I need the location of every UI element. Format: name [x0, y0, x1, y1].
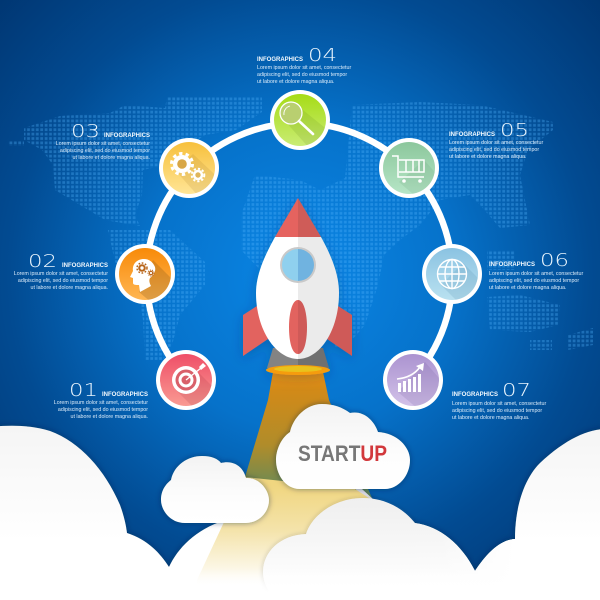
cloud bank silhouette — [0, 426, 600, 600]
text block 01: INFOGRAPHICS — [102, 392, 148, 398]
text block 04 — [257, 45, 351, 85]
text block 02: ut labore et dolore magna aliqua. — [31, 285, 108, 291]
rocket center stripe — [289, 300, 307, 354]
icon: head with gears — [130, 259, 155, 292]
text block 03: ut labore et dolore magna aliqua. — [73, 155, 150, 161]
text block 01: 01 — [69, 380, 98, 401]
text block 07: INFOGRAPHICS — [452, 392, 498, 398]
step 02 circle — [115, 244, 175, 304]
text block 05: 05 — [500, 120, 529, 141]
text block 06: 06 — [540, 250, 569, 271]
text block 07: ut labore et dolore magna aliqua. — [452, 415, 529, 421]
rocket nozzle — [267, 348, 298, 368]
text block 05 — [449, 120, 543, 160]
text block 05: INFOGRAPHICS — [449, 132, 495, 138]
rocket — [243, 198, 352, 375]
text block 02: adipiscing elit, sed do eiusmod tempor — [18, 278, 108, 284]
text block 04: INFOGRAPHICS — [257, 57, 303, 63]
icon: growth chart — [397, 363, 424, 392]
step 06 circle — [422, 244, 482, 304]
text block 04: ut labore et dolore magna aliqua. — [257, 79, 334, 85]
front cloud — [263, 498, 450, 600]
text block 03: INFOGRAPHICS — [104, 133, 150, 139]
text block 05: ut labore et dolore magna aliqua. — [449, 154, 526, 160]
dotted world map — [0, 90, 600, 360]
text block 02: INFOGRAPHICS — [62, 263, 108, 269]
step 04 circle — [270, 90, 330, 150]
text block 01: adipiscing elit, sed do eiusmod tempor — [58, 407, 148, 413]
step 07 circle — [383, 350, 443, 410]
text block 05: Lorem ipsum dolor sit amet, consectetur — [449, 140, 543, 146]
icon: target — [172, 363, 206, 394]
text block 06: INFOGRAPHICS — [489, 262, 535, 268]
rocket fins — [243, 306, 352, 356]
text block 02 — [14, 251, 108, 291]
text block 02: 02 — [28, 251, 57, 272]
lit beam on the cloud bank — [197, 477, 415, 590]
rocket exhaust beam — [245, 372, 372, 498]
text block 05: adipiscing elit, sed do eiusmod tempor — [449, 147, 539, 153]
rocket flame ring — [266, 365, 330, 375]
text block 06: ut labore et dolore magna aliqua. — [489, 285, 566, 291]
step 03 circle — [159, 138, 219, 198]
text block 07: Lorem ipsum dolor sit amet, consectetur — [452, 401, 546, 407]
text block 03 — [56, 121, 150, 161]
small cloud — [161, 456, 269, 523]
icon: globe — [438, 260, 466, 288]
text block 03: adipiscing elit, sed do eiusmod tempor — [60, 148, 150, 154]
step 05 circle — [379, 138, 439, 198]
text block 07 — [452, 380, 546, 421]
rocket window — [280, 247, 316, 283]
text block 06: Lorem ipsum dolor sit amet, consectetur — [489, 271, 583, 277]
text block 01 — [54, 380, 148, 420]
startup cloud — [276, 404, 410, 489]
startup label: STARTUP — [298, 441, 387, 466]
text block 01: Lorem ipsum dolor sit amet, consectetur — [54, 400, 148, 406]
white fade along the bottom — [0, 568, 600, 592]
text block 03: Lorem ipsum dolor sit amet, consectetur — [56, 141, 150, 147]
text block 06: adipiscing elit, sed do eiusmod tempor — [489, 278, 579, 284]
step 01 circle — [156, 350, 216, 410]
text block 03: 03 — [71, 121, 100, 142]
icon: gears — [172, 154, 204, 181]
text block 01: ut labore et dolore magna aliqua. — [71, 414, 148, 420]
front cloud right lobe blending into the bank — [415, 523, 515, 600]
icon: shopping cart — [392, 156, 424, 183]
text block 04: adipiscing elit, sed do eiusmod tempor — [257, 72, 347, 78]
icon: magnifier — [280, 102, 313, 134]
text block 02: Lorem ipsum dolor sit amet, consectetur — [14, 271, 108, 277]
text block 04: Lorem ipsum dolor sit amet, consectetur — [257, 65, 351, 71]
text block 06 — [489, 250, 583, 291]
rocket nose cone — [275, 198, 321, 237]
text block 07: 07 — [502, 380, 531, 401]
rocket body — [256, 237, 339, 359]
text block 07: adipiscing elit, sed do eiusmod tempor — [452, 408, 542, 414]
ring connecting the steps — [147, 123, 453, 394]
text block 04: 04 — [308, 45, 337, 66]
